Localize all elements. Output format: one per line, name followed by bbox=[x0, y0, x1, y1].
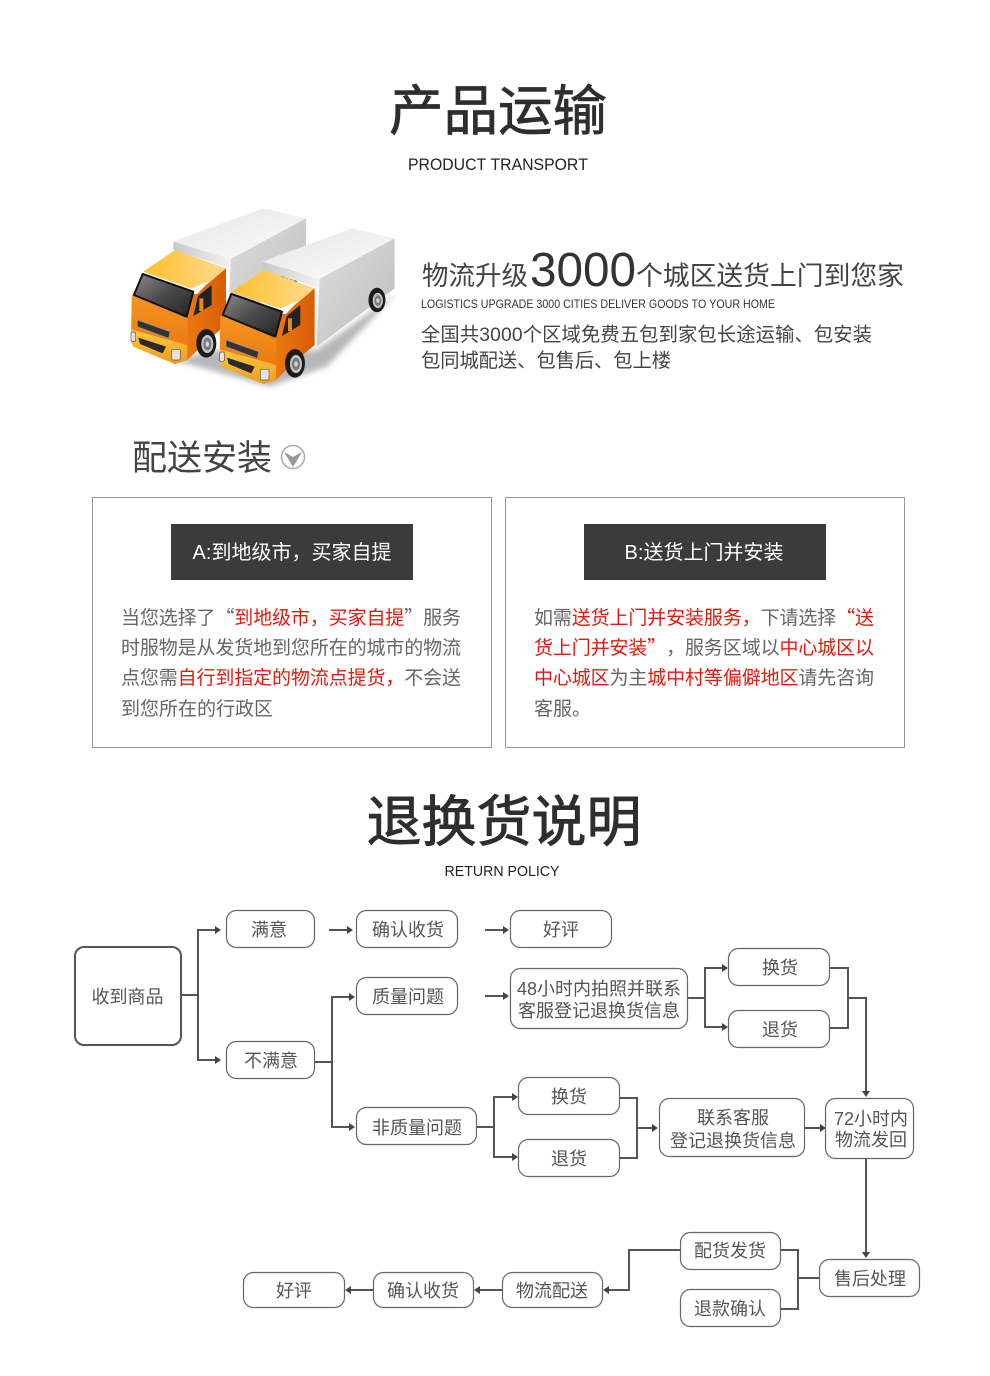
logistics headline: 3000 bbox=[530, 244, 636, 297]
node: quality issue bbox=[356, 978, 458, 1014]
node: goods received bbox=[75, 947, 181, 1045]
option B header bbox=[584, 524, 826, 580]
node: after-sales handling: 售后处理 bbox=[834, 1269, 906, 1289]
icon: two orange delivery trucks bbox=[131, 208, 397, 387]
node: satisfied: 满意 bbox=[251, 920, 287, 940]
logistics headline bbox=[422, 244, 904, 297]
option B text: 如需送货上门并安装服务，下请选择“送 bbox=[534, 603, 874, 630]
node: return bbox=[728, 1010, 830, 1048]
option A text: 时服物是从发货地到您所在的城市的物流 bbox=[121, 633, 461, 660]
node: pick and ship: 配货发货 bbox=[694, 1241, 766, 1261]
option A text: 到您所在的行政区 bbox=[121, 694, 273, 721]
node: good review bbox=[510, 910, 612, 948]
option B header: B:送货上门并安装 bbox=[625, 541, 783, 564]
logistics english subtitle: LOGISTICS UPGRADE 3000 CITIES DELIVER GOODS TO YOUR HOME bbox=[421, 297, 775, 311]
connectors bbox=[181, 926, 870, 1309]
node: exchange (non-quality): 换货 bbox=[551, 1087, 587, 1107]
node: contact customer service: 联系客服 bbox=[697, 1108, 769, 1128]
title: return policy: RETURN POLICY bbox=[444, 863, 560, 880]
heading: delivery and installation: 配送安装 bbox=[132, 430, 272, 481]
node: pick and ship bbox=[680, 1232, 780, 1270]
node: unsatisfied bbox=[226, 1042, 314, 1078]
node: contact customer service bbox=[660, 1098, 804, 1156]
node: return (non-quality): 退货 bbox=[551, 1149, 587, 1169]
logistics headline: 物流升级 bbox=[422, 254, 528, 293]
option B text: 客服。 bbox=[534, 694, 591, 721]
node: contact within 48 hours bbox=[510, 968, 688, 1028]
node: return: 退货 bbox=[762, 1020, 798, 1040]
node: refund confirmation bbox=[680, 1290, 780, 1326]
title: return policy: 退换货说明 bbox=[366, 777, 642, 857]
option A text: 当您选择了“到地级市，买家自提”服务 bbox=[121, 603, 461, 630]
option A text: 点您需自行到指定的物流点提货，不会送 bbox=[121, 663, 461, 690]
node: ship back within 72 hours: 72小时内 bbox=[834, 1109, 908, 1129]
node: return (non-quality) bbox=[518, 1140, 620, 1176]
node: satisfied bbox=[226, 910, 314, 948]
node: good review (final): 好评 bbox=[276, 1281, 312, 1301]
node: good review: 好评 bbox=[543, 920, 579, 940]
node: logistics delivery bbox=[502, 1272, 602, 1308]
option A header: A:到地级市，买家自提 bbox=[193, 541, 391, 564]
node: logistics delivery: 物流配送 bbox=[516, 1281, 588, 1301]
logistics headline: 个城区送货上门到您家 bbox=[636, 254, 904, 293]
node: good review (final) bbox=[244, 1272, 344, 1308]
node: ship back within 72 hours: 物流发回 bbox=[835, 1130, 907, 1150]
option B text bbox=[534, 603, 874, 721]
node: exchange bbox=[728, 948, 830, 986]
option B text: 中心城区为主城中村等偏僻地区请先咨询 bbox=[534, 663, 874, 690]
node: confirm receipt (final): 确认收货 bbox=[387, 1281, 459, 1301]
node: non-quality issue bbox=[356, 1108, 476, 1144]
title: product transport: 产品运输 bbox=[389, 67, 607, 146]
title: product transport: PRODUCT TRANSPORT bbox=[408, 156, 588, 174]
logistics description: 包同城配送、包售后、包上楼 bbox=[421, 350, 671, 372]
node: ship back within 72 hours bbox=[826, 1098, 914, 1158]
node: goods received: 收到商品 bbox=[92, 987, 164, 1007]
node: contact customer service: 登记退换货信息 bbox=[670, 1131, 796, 1151]
logistics description bbox=[421, 324, 872, 372]
icon: circled down chevron bbox=[282, 446, 304, 468]
panel: option A bbox=[92, 498, 492, 748]
node: confirm receipt (final) bbox=[374, 1272, 474, 1308]
node: contact within 48 hours: 48小时内拍照并联系 bbox=[517, 979, 681, 999]
option B text: 货上门并安装”，服务区域以中心城区以 bbox=[534, 633, 874, 660]
ground shadow bbox=[173, 293, 397, 387]
node: refund confirmation: 退款确认 bbox=[694, 1299, 766, 1319]
node: confirm receipt bbox=[356, 910, 458, 948]
node: exchange (non-quality) bbox=[518, 1078, 620, 1114]
node: confirm receipt: 确认收货 bbox=[372, 920, 444, 940]
node: non-quality issue: 非质量问题 bbox=[372, 1118, 462, 1138]
panel: option B bbox=[506, 498, 904, 748]
node: unsatisfied: 不满意 bbox=[244, 1051, 298, 1071]
node: contact within 48 hours: 客服登记退换货信息 bbox=[518, 1001, 680, 1021]
option A text bbox=[121, 603, 461, 721]
node: quality issue: 质量问题 bbox=[372, 987, 444, 1007]
node: exchange: 换货 bbox=[762, 958, 798, 978]
option A header bbox=[171, 524, 413, 580]
flowchart: return process bbox=[75, 910, 920, 1326]
node: after-sales handling bbox=[820, 1260, 920, 1296]
logistics description: 全国共3000个区域免费五包到家包长途运输、包安装 bbox=[421, 324, 872, 346]
